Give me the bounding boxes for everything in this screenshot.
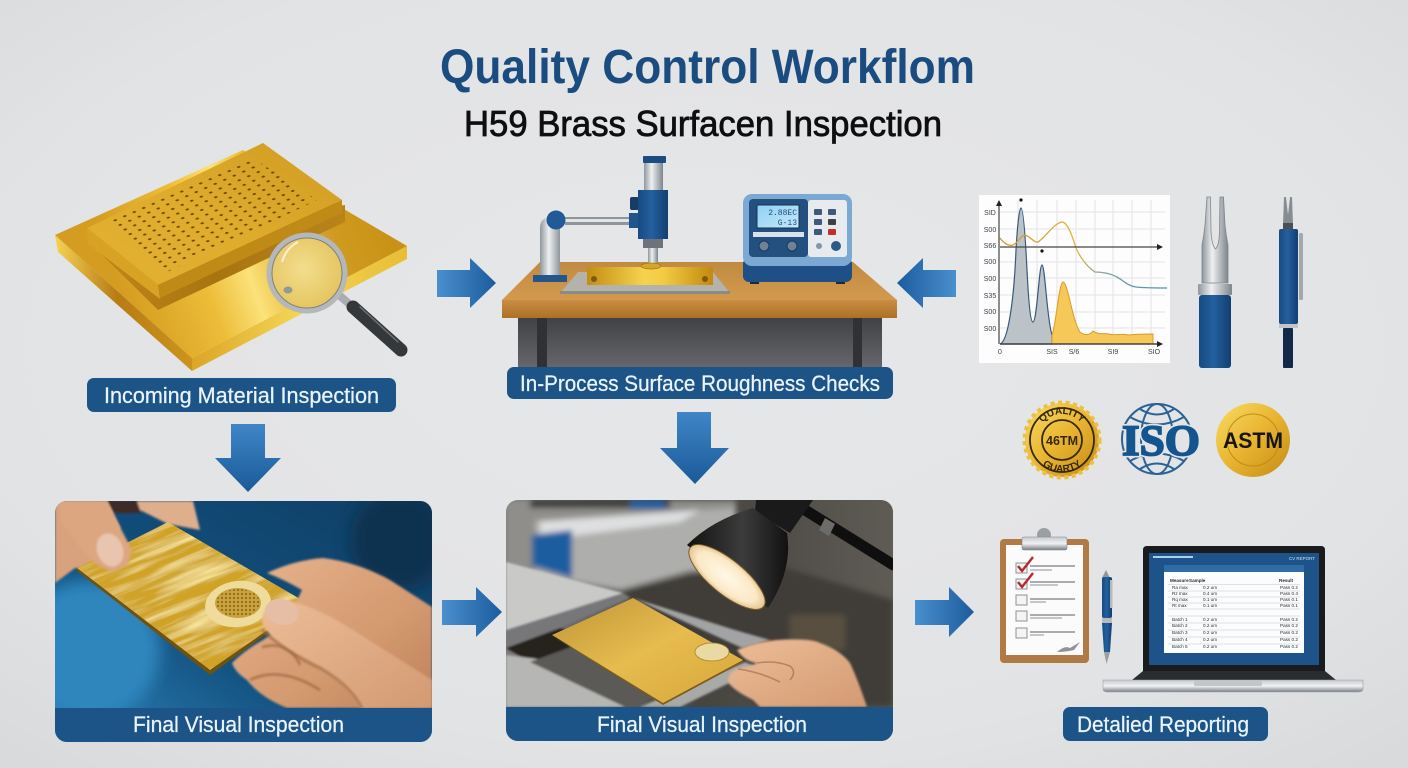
icon: laptop with report table: Pass 0.2 <box>1280 637 1298 642</box>
icon: laptop with report table: Pass 0.2 <box>1280 617 1298 622</box>
badge: iso globe: ISO <box>1122 418 1200 465</box>
icon: laptop with report table: 0.2 um <box>1203 623 1217 628</box>
chart series: gold peak <box>1052 282 1153 344</box>
chart axis labels: S/6 <box>1069 349 1079 356</box>
icon: laptop with report table: Ra max <box>1172 585 1189 590</box>
chart series: profile line <box>1000 222 1167 288</box>
chart axis labels: 0 <box>998 349 1002 356</box>
icon: laptop with report table: 0.2 um <box>1203 585 1217 590</box>
caption bar <box>506 707 893 741</box>
label: detailed reporting: Detalied Reporting <box>1077 712 1249 737</box>
arrow: chart to in-process <box>897 258 956 308</box>
chart axis labels: S00 <box>984 326 996 333</box>
caption bar <box>55 708 432 742</box>
inspection table <box>506 562 770 707</box>
arrow: final visual to final visual <box>442 587 502 637</box>
icon: magnifying glass <box>269 235 401 350</box>
chart axis labels: SIS <box>1046 349 1058 356</box>
right hand <box>232 558 432 708</box>
icon: brass plates <box>55 143 407 371</box>
badge: iso globe: ISO <box>1122 418 1200 465</box>
icon: digital readout unit: 2.88EC <box>768 209 797 218</box>
label: incoming material inspection: Incoming Material Inspection <box>104 383 379 408</box>
icon: laptop with report table: Pass 0.1 <box>1280 597 1298 602</box>
arrow: incoming down to final visual <box>215 424 281 492</box>
icon: digital readout unit: G-13 <box>778 219 797 228</box>
icon: laptop with report table: Batch 2 <box>1172 623 1188 628</box>
label: incoming material inspection <box>87 378 396 412</box>
chart axis labels: S00 <box>984 227 996 234</box>
icon: laptop with report table: Pass 0.2 <box>1280 630 1298 635</box>
photo: brass sample under lamp <box>506 500 895 741</box>
brass plate <box>552 598 743 705</box>
icon: laptop with report table: Pass 0.2 <box>1280 623 1298 628</box>
icon: laptop with report table: Rz max <box>1172 591 1188 596</box>
panel: final visual inspection (hands) <box>55 501 432 742</box>
caption bar: Final Visual Inspection <box>597 712 807 737</box>
badge: quality seal <box>1022 400 1102 480</box>
chart axis labels: S35 <box>984 293 996 300</box>
chart axis labels: S66 <box>984 243 996 250</box>
icon: laptop with report table: Batch 5 <box>1172 644 1188 649</box>
badge: astm coin <box>1216 403 1290 477</box>
brass sample <box>77 568 270 675</box>
icon: laptop with report table: 0.2 um <box>1203 644 1217 649</box>
icon: laptop with report table: 0.2 um <box>1203 637 1217 642</box>
icon: laptop with report table: Measure <box>1170 578 1189 583</box>
label: detailed reporting <box>1063 707 1268 741</box>
upper thumb <box>60 501 132 572</box>
icon: pen <box>1102 570 1112 664</box>
icon: clipboard checklist <box>1000 528 1089 663</box>
icon: pen probe <box>1279 197 1303 368</box>
chart axis labels: S00 <box>984 276 996 283</box>
panel: incoming material inspection <box>55 143 407 412</box>
chart axes <box>996 200 1163 347</box>
icon: roughness tester stand <box>533 156 730 294</box>
arrow: final visual to reporting <box>915 587 974 637</box>
chart series: grey peaks <box>1000 208 1052 344</box>
badge: quality seal: GUARTY <box>1044 460 1079 472</box>
chart axis labels: SIO <box>1148 349 1161 356</box>
icon: laptop with report table: Rq max <box>1172 597 1189 602</box>
hand <box>728 639 867 707</box>
badge: iso globe <box>1122 404 1200 474</box>
chart axis labels: S00 <box>984 309 996 316</box>
test coin <box>205 580 271 628</box>
icon: workbench <box>502 262 897 369</box>
icon: laptop with report table: Sample <box>1189 578 1206 583</box>
icon: laptop with report table: 0.2 um <box>1203 630 1217 635</box>
subtitle: H59 Brass Surfacen Inspection <box>464 103 942 144</box>
label: in-process surface roughness checks: In-Process Surface Roughness Checks <box>520 371 880 396</box>
badge: quality seal: QUALITY <box>1040 407 1086 422</box>
badge: quality seal: 46TM <box>1046 433 1078 448</box>
icon: laptop with report table: Pass 0.4 <box>1280 591 1298 596</box>
badge: astm coin: ASTM <box>1223 428 1283 453</box>
arrow: in-process down to final visual <box>660 412 729 484</box>
icon: laptop with report table: 0.1 um <box>1203 603 1217 608</box>
icon: laptop with report table <box>1103 546 1363 692</box>
icon: laptop with report table: Pass 0.2 <box>1280 644 1298 649</box>
icon: laptop with report table: 0.1 um <box>1203 597 1217 602</box>
icon: laptop with report table: Rt max <box>1172 603 1187 608</box>
icon: laptop with report table: Batch 1 <box>1172 617 1188 622</box>
upper hand back <box>55 501 200 583</box>
photo: hands passing brass sample <box>55 501 432 742</box>
arrow: incoming to in-process <box>437 258 496 308</box>
chart axis labels: SID <box>984 210 996 217</box>
caption bar: Final Visual Inspection <box>133 712 344 737</box>
lamp <box>687 500 893 610</box>
chart axis labels: S00 <box>984 259 996 266</box>
icon: laptop with report table: CV REPORT <box>1289 556 1315 561</box>
icon: laptop with report table: 0.4 um <box>1203 591 1217 596</box>
chart axis labels <box>984 210 1161 356</box>
icon: laptop with report table: 0.2 um <box>1203 617 1217 622</box>
panel: in-process roughness checks <box>502 156 897 399</box>
icon: laptop with report table: Pass 0.2 <box>1280 585 1298 590</box>
icon: laptop with report table: Batch 4 <box>1172 637 1188 642</box>
title: Quality Control Workflom <box>440 41 975 94</box>
icon: laptop with report table: Pass 0.1 <box>1280 603 1298 608</box>
chart: surface roughness profile <box>979 195 1170 363</box>
icon: laptop with report table: Result <box>1279 578 1294 583</box>
icon: fork stylus probe <box>1198 197 1232 368</box>
panel: final visual inspection (lamp) <box>506 500 895 741</box>
icon: laptop with report table: Batch 3 <box>1172 630 1188 635</box>
chart axis labels: SI9 <box>1108 349 1118 356</box>
icon: digital readout unit <box>743 194 852 284</box>
panel: detailed reporting <box>1000 528 1363 741</box>
